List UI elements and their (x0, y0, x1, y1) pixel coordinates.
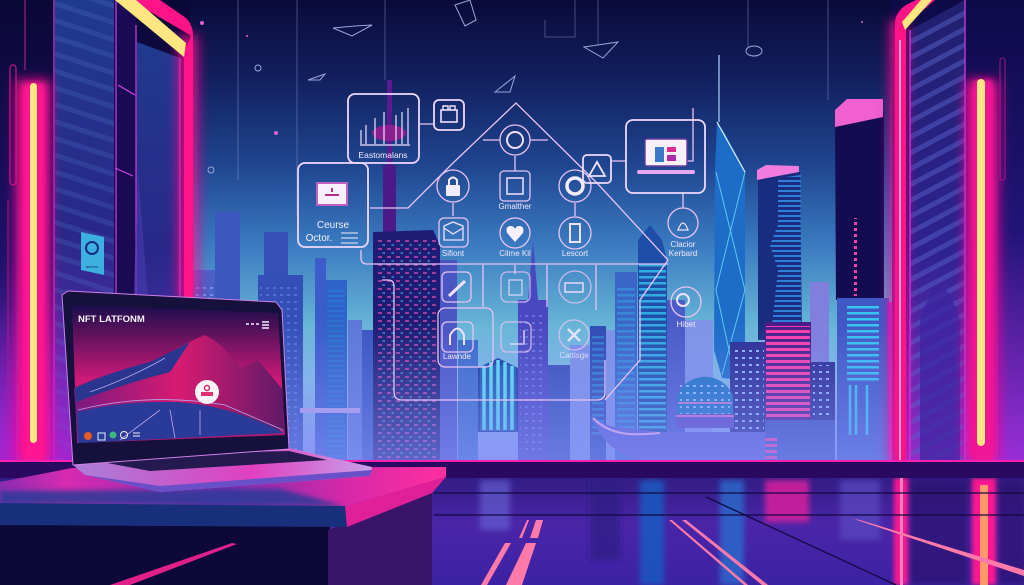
diagram: fourth icon row (438, 308, 589, 367)
cyan striped low building (478, 358, 518, 432)
icon: magnifier with label: Hibet (677, 320, 696, 329)
icon: diagram top ring (500, 125, 530, 155)
diagram: fourth icon row: Cattisge (559, 351, 589, 360)
icon: building circle with label: Lescort (562, 249, 589, 258)
icon: heart with label: Cilme Kil (499, 249, 531, 258)
star particles (200, 21, 863, 135)
panel: customer analytics card (348, 94, 419, 163)
left neon wall (0, 0, 190, 462)
icon: user circle with label: Kerbard (669, 249, 697, 258)
icon: padlock (437, 170, 469, 202)
icon: user circle with label: Clacior (671, 240, 696, 249)
floating paper shapes and hanging lines (208, 0, 828, 215)
panel: laptop dashboard card (626, 120, 705, 193)
panel: customer analytics card: Eastomalans (358, 150, 408, 160)
icon: wall badge (81, 232, 104, 275)
main dark tower with TV mast (372, 80, 440, 462)
icon: envelope with label (439, 218, 468, 258)
icon: triangle card (583, 155, 611, 183)
floor neon streaks (481, 519, 1024, 585)
floor with city reflections (0, 462, 1024, 585)
icon: heart with label (499, 218, 531, 258)
icon: document with label: Gmalther (499, 202, 532, 211)
panel: course order card: Octor. (306, 233, 332, 244)
icon: document with label (499, 171, 532, 211)
laptop (62, 291, 372, 492)
icon: building circle with label (559, 217, 591, 258)
diagram: fourth icon row: Lawnde (443, 352, 472, 361)
window textures on the mid-ground buildings (192, 285, 635, 460)
skyline: distant and mid-ground city buildings (190, 212, 829, 462)
icon: gift box (434, 100, 464, 130)
diagram: third icon row (442, 271, 591, 303)
pink striped and dotted buildings (730, 322, 835, 462)
panel: course order card (298, 163, 368, 247)
icon: magnifier with label (671, 287, 701, 329)
icon: envelope with label: Sifiont (442, 249, 465, 258)
window sill bar (0, 460, 1024, 478)
icon: user circle with label (668, 208, 698, 258)
panel: course order card: Ceurse (317, 220, 350, 231)
laptop screen (72, 305, 285, 443)
icon: ring (559, 170, 591, 202)
cyan tower centre right (638, 225, 667, 460)
laptop screen: NFT LATFONM (78, 314, 145, 325)
waterfront and reflections (300, 408, 765, 460)
domed building (676, 377, 734, 428)
dark blue tower with pink top (757, 165, 802, 340)
diagram: connector lines (361, 103, 693, 400)
icon: wall badge: aonom (86, 264, 99, 269)
right neon wall (892, 0, 1024, 462)
atmospheric haze over the lower city (190, 320, 895, 461)
left neon glow and bars (16, 0, 198, 462)
right neon glow and bars (890, 0, 998, 462)
desk (0, 467, 446, 585)
blue diamond skyscraper with spire (714, 55, 745, 380)
tall dark tower with pink cap (835, 99, 897, 462)
